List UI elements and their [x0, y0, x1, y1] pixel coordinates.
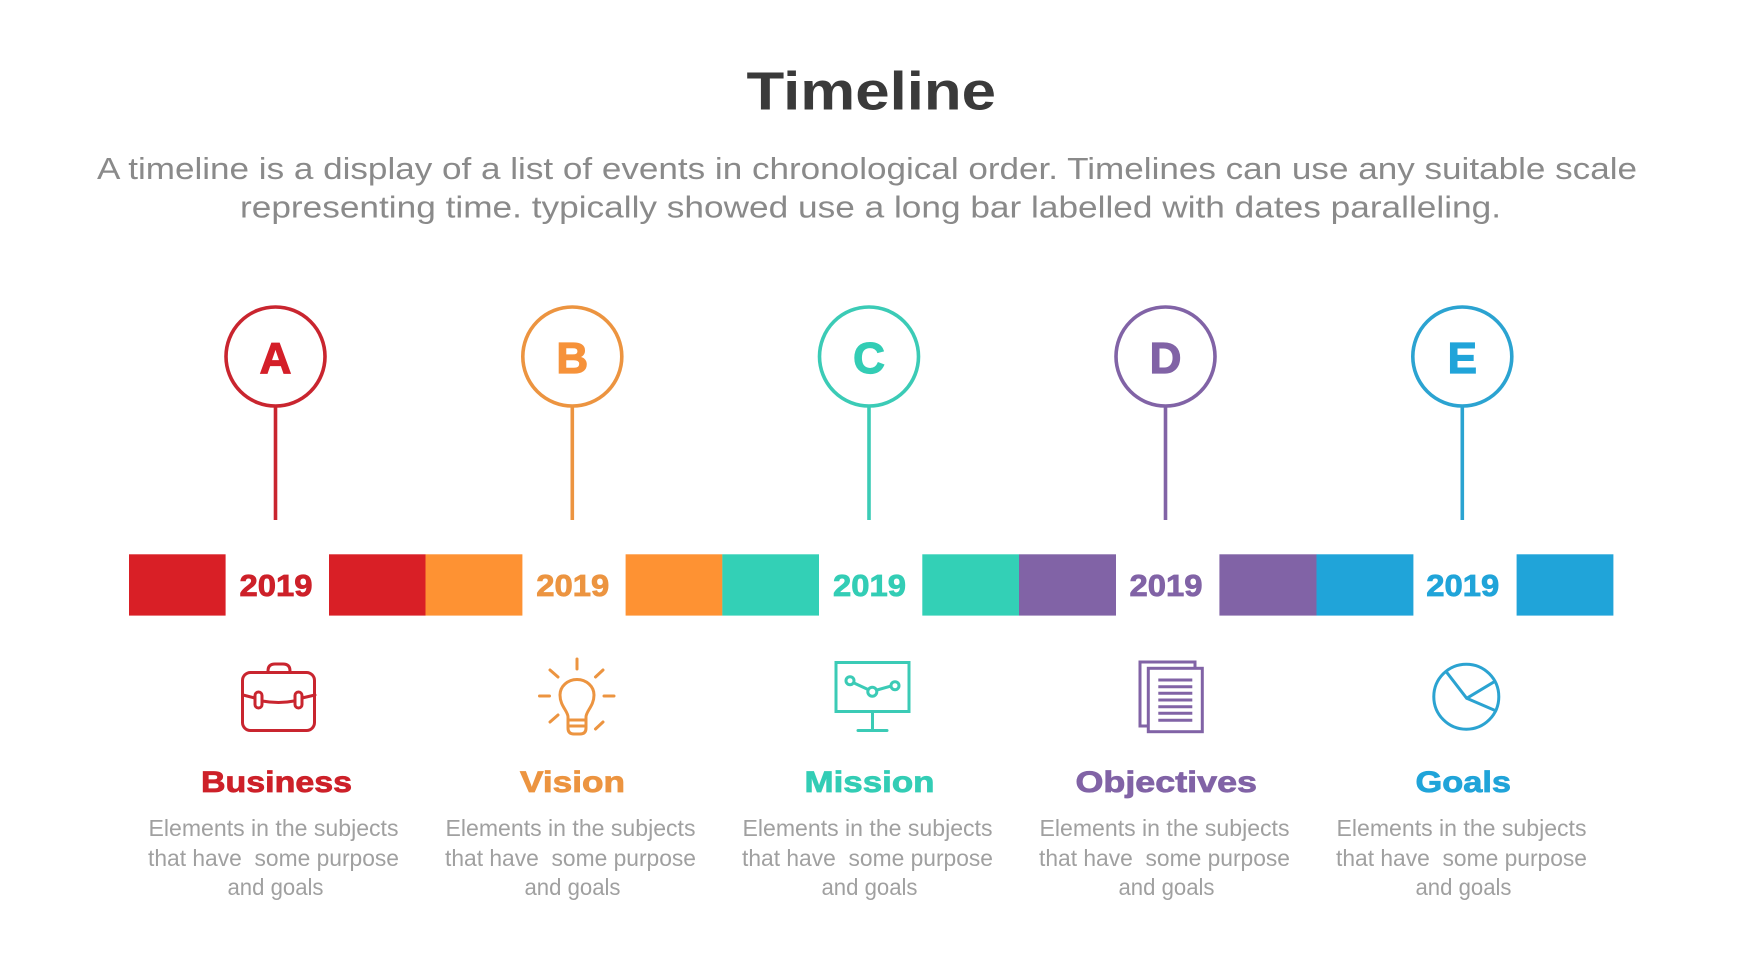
description	[148, 815, 399, 900]
description	[1336, 815, 1587, 900]
description: Elements in the subjects	[446, 815, 696, 841]
description: and goals	[822, 874, 918, 900]
year 2019: 2019	[240, 568, 312, 603]
description	[742, 815, 993, 900]
pin E: E	[1448, 334, 1477, 383]
label Goals: Goals	[1416, 766, 1511, 799]
icon: light bulb	[540, 659, 614, 734]
timeline bar	[129, 554, 1613, 616]
description	[445, 815, 696, 900]
column D: Objectives	[1039, 307, 1290, 900]
pin D: D	[1150, 334, 1181, 383]
pin C: C	[853, 334, 885, 383]
description: Elements in the subjects	[148, 815, 398, 841]
pin B	[523, 307, 622, 520]
column A: Business	[148, 307, 399, 900]
pin A: A	[260, 334, 291, 383]
label Business: Business	[201, 766, 352, 799]
icon: presentation screen	[836, 662, 909, 730]
description: Elements in the subjects	[1040, 815, 1290, 841]
description: Elements in the subjects	[1336, 815, 1586, 841]
label Objectives: Objectives	[1076, 766, 1257, 799]
subtitle text	[97, 151, 1637, 224]
description	[1039, 815, 1290, 900]
icon: briefcase	[242, 664, 315, 730]
year 2019: 2019	[536, 568, 609, 603]
description: that have some purpose	[148, 845, 399, 871]
pin B: B	[556, 334, 588, 383]
pin D	[1116, 307, 1215, 520]
icon: pie chart	[1434, 664, 1499, 729]
year 2019: 2019	[1130, 568, 1202, 603]
label Mission: Mission	[804, 766, 934, 799]
title: Timeline	[746, 62, 996, 122]
description: and goals	[1416, 874, 1512, 900]
pin C	[820, 307, 918, 520]
column B: Vision	[445, 307, 696, 900]
subtitle text: representing time. typically showed use a long bar labelled with dates paralleling.	[240, 190, 1501, 224]
description: that have some purpose	[742, 845, 993, 871]
icon: documents	[1140, 662, 1202, 732]
year 2019: 2019	[1426, 568, 1499, 603]
description: that have some purpose	[1039, 845, 1290, 871]
description: Elements in the subjects	[742, 815, 992, 841]
description: and goals	[1118, 874, 1214, 900]
description: and goals	[228, 874, 324, 900]
year 2019: 2019	[833, 568, 906, 603]
label Vision: Vision	[520, 766, 625, 799]
pin E	[1413, 307, 1512, 520]
pin A	[226, 307, 325, 520]
column C: Mission	[742, 307, 993, 900]
description: that have some purpose	[1336, 845, 1587, 871]
description: that have some purpose	[445, 845, 696, 871]
subtitle text: A timeline is a display of a list of events in chronological order. Timelines can use any suitable scale	[97, 151, 1637, 186]
column E: Goals	[1336, 307, 1587, 900]
description: and goals	[524, 874, 620, 900]
